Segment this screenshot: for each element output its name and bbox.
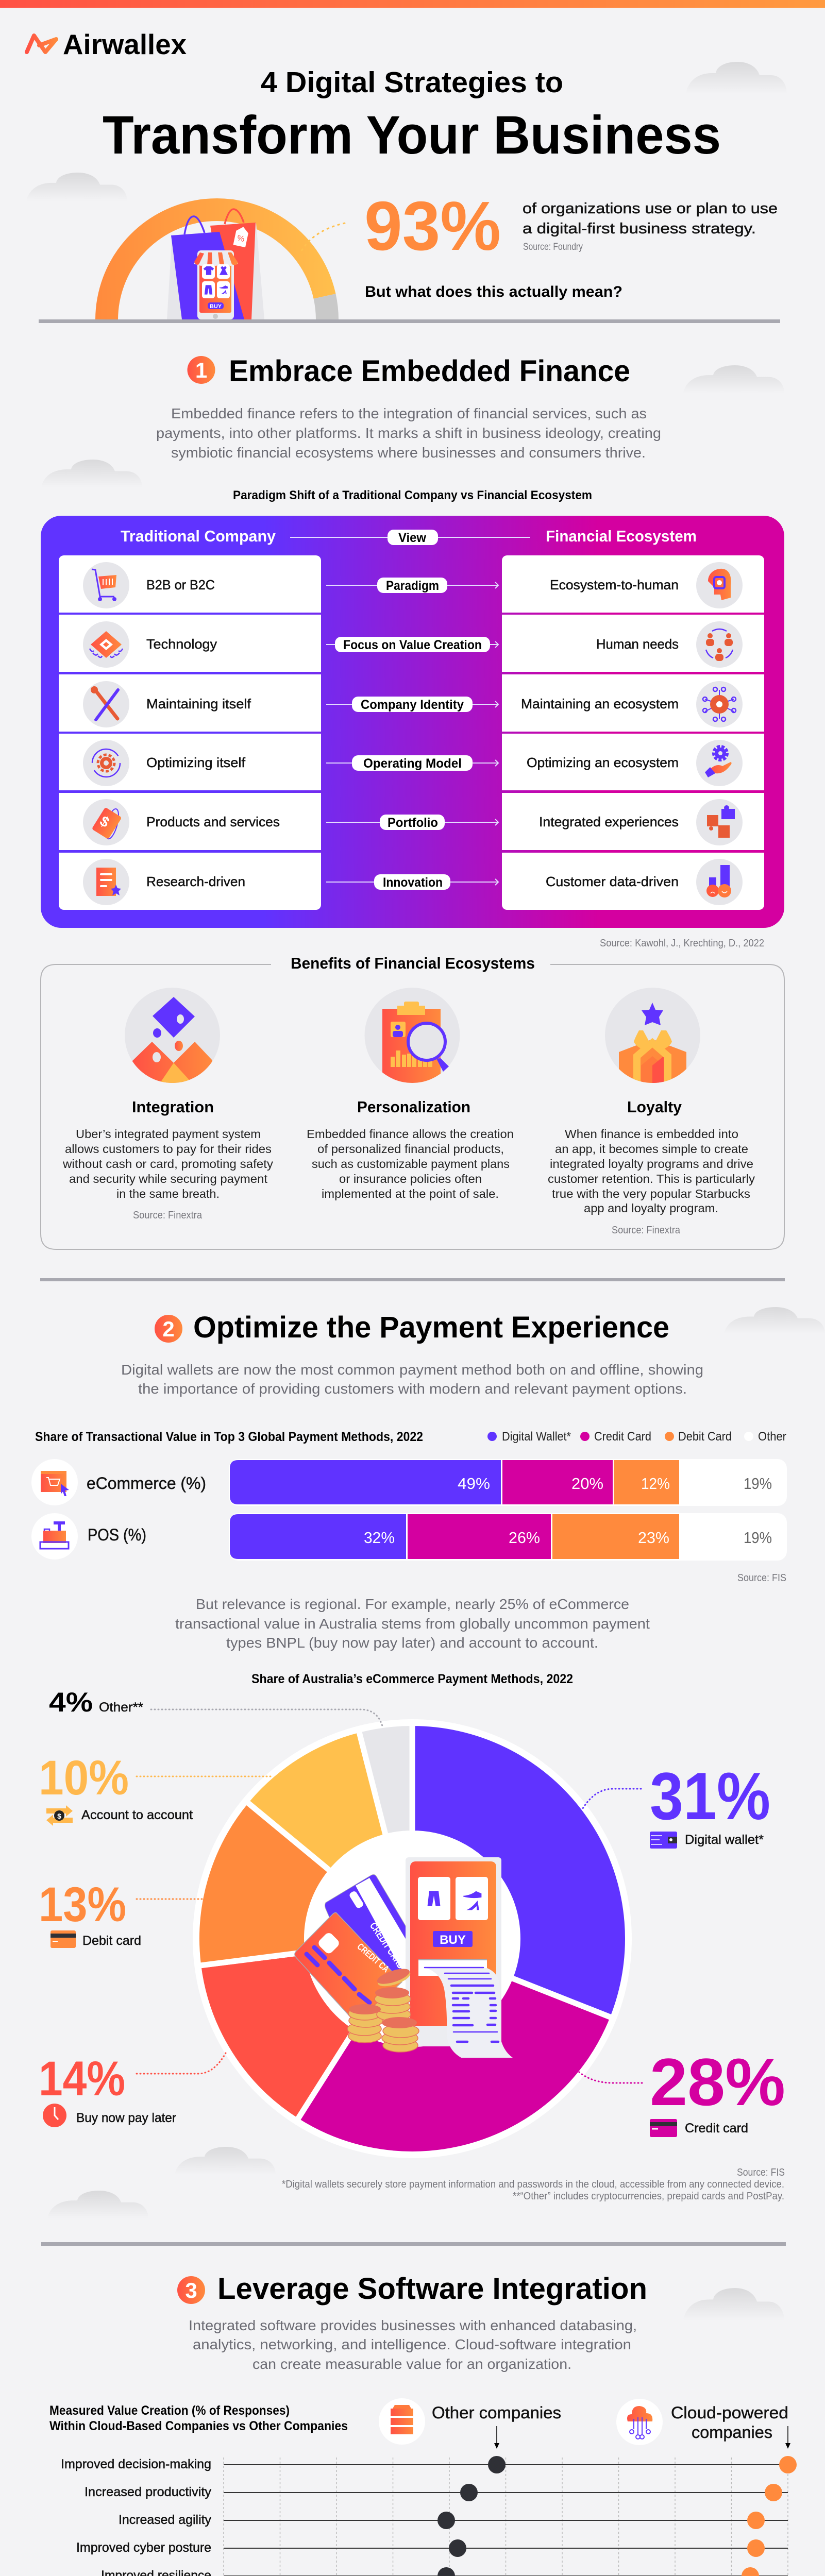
heading: section 1: 1	[195, 358, 207, 382]
icon: POS register	[31, 1513, 78, 1560]
text: embedded finance intro: symbiotic financial ecosystems where businesses and consumers thrive.	[171, 445, 646, 461]
right column text: Customer data-driven	[546, 874, 679, 889]
label: account to account 10 percent: 10%	[39, 1751, 129, 1805]
text: integrated software intro: analytics, networking, and intelligence. Cloud-software integration	[193, 2336, 631, 2352]
left column text: Maintaining itself	[146, 696, 251, 711]
icon: transfer	[46, 1805, 73, 1826]
donut chart: Australia payment methods	[193, 1719, 632, 2158]
table header: View	[398, 531, 427, 545]
row labels: centre pills: Company Identity	[361, 698, 464, 712]
title	[103, 66, 721, 165]
icon: debit card	[50, 1930, 76, 1948]
benefit: integration: Integration	[132, 1098, 214, 1116]
illustration: checkout terminal, cards and coins: CREDIT CARD	[367, 1920, 407, 1971]
arrows between columns	[326, 582, 498, 885]
icon: clock	[43, 2104, 66, 2127]
logo: Airwallex: Airwallex	[63, 28, 187, 60]
label: account to account 10 percent: Account to account	[81, 1808, 193, 1822]
label: debit card 13 percent	[39, 1877, 203, 1948]
label: credit card 28 percent: Credit card	[685, 2121, 748, 2136]
row labels: Improved cyber posture	[76, 2540, 211, 2555]
icon: cart	[83, 562, 129, 608]
row labels: centre pills: Innovation	[383, 875, 443, 890]
bar chart: POS: 19%	[744, 1529, 772, 1547]
icon: transfer: $	[57, 1812, 61, 1820]
right column text: Maintaining an ecosystem	[521, 696, 679, 711]
text: digital wallets intro: the importance of providing customers with modern and relevant payment options.	[138, 1381, 687, 1397]
bar chart: POS	[31, 1513, 787, 1561]
text: relevance is regional: But relevance is regional. For example, nearly 25% of eCommerce	[196, 1596, 629, 1612]
stat: 93 percent: Source: Foundry	[523, 242, 583, 252]
legend: payment methods: Digital Wallet*	[502, 1430, 571, 1444]
title: Transform Your Business	[103, 105, 721, 165]
icon: network	[696, 681, 743, 727]
icon: head with chip	[696, 562, 743, 608]
benefit: loyalty: integrated loyalty programs and drive	[550, 1157, 753, 1171]
table header	[121, 527, 697, 545]
benefit: integration: allows customers to pay for their rides	[65, 1142, 272, 1156]
bar chart: POS: 32%	[364, 1529, 395, 1547]
icon: tools	[83, 681, 129, 727]
benefit: integration: without cash or card, promoting safety	[62, 1157, 274, 1171]
legend: cloud-powered companies	[616, 2399, 790, 2449]
stat: 93 percent: of organizations use or plan to use	[523, 200, 778, 217]
legend: cloud-powered companies: companies	[692, 2423, 772, 2442]
text: relevance is regional: types BNPL (buy now pay later) and account to account.	[226, 1635, 598, 1651]
icon: price tag	[83, 799, 129, 845]
label: credit card 28 percent	[579, 2044, 785, 2137]
label: credit card 28 percent: 28%	[650, 2044, 785, 2120]
legend: other companies: Other companies	[432, 2403, 561, 2422]
left column text: B2B or B2C	[146, 577, 215, 592]
bar chart: POS: 23%	[638, 1529, 669, 1547]
text: integrated software intro	[189, 2317, 637, 2372]
dumbbell chart: value creation	[34, 2456, 804, 2576]
bar chart: eCommerce: 49%	[458, 1475, 490, 1493]
bar chart: POS: 26%	[509, 1529, 540, 1547]
chart title: measured value creation: Measured Value Creation (% of Responses)	[49, 2403, 290, 2418]
text: digital wallets intro: Digital wallets are now the most common payment method both on and offline, showing	[121, 1362, 703, 1378]
source: paradigm table: Source: Kawohl, J., Krechting, D., 2022	[600, 938, 764, 949]
label: buy now pay later 14 percent	[39, 2052, 226, 2127]
benefit: loyalty: app and loyalty program.	[584, 1201, 718, 1215]
label: digital wallet 31 percent: 31%	[650, 1758, 770, 1834]
illustration: checkout terminal, cards and coins	[295, 1857, 513, 2058]
right column text: Integrated experiences	[539, 814, 679, 829]
heading: benefits: Benefits of Financial Ecosystems	[291, 954, 535, 972]
icon: puzzle pieces	[696, 799, 743, 845]
illustration: gauge with shopping bags and phone	[107, 209, 347, 319]
table header: Traditional Company	[121, 527, 276, 545]
bar chart: eCommerce: eCommerce (%)	[87, 1474, 206, 1493]
chart title: paradigm shift: Paradigm Shift of a Traditional Company vs Financial Ecosystem	[233, 488, 592, 502]
benefit: integration	[62, 1098, 274, 1221]
row labels: Increased agility	[119, 2513, 211, 2527]
notes: donut sources: **“Other” includes cryptocurrencies, prepaid cards and PostPay.	[513, 2191, 784, 2202]
icon: eCommerce	[31, 1459, 78, 1505]
benefit: loyalty: an app, it becomes simple to create	[555, 1142, 748, 1156]
label: buy now pay later 14 percent: Buy now pay later	[76, 2111, 176, 2125]
icon: people circle	[696, 621, 743, 668]
legend: cloud-powered companies: Cloud-powered	[671, 2403, 788, 2422]
label: other 4 percent: 4%	[49, 1687, 93, 1718]
left column text: Optimizing itself	[146, 755, 246, 770]
chart title: Australia payments: Share of Australia’s eCommerce Payment Methods, 2022	[251, 1672, 573, 1686]
bar chart: POS: POS (%)	[88, 1526, 146, 1544]
right column text	[521, 577, 679, 889]
icon: chip	[83, 621, 129, 668]
benefit: personalization: Personalization	[357, 1098, 470, 1116]
benefit: personalization: implemented at the point of sale.	[322, 1187, 499, 1200]
right column text: Human needs	[596, 636, 679, 652]
icon: hand and gear	[696, 740, 743, 786]
bar chart: eCommerce: 20%	[571, 1475, 603, 1493]
row labels: centre pills: Focus on Value Creation	[343, 638, 482, 652]
heading: section 2: Optimize the Payment Experience	[193, 1311, 669, 1344]
right column text: Optimizing an ecosystem	[527, 755, 679, 770]
label: debit card 13 percent: 13%	[39, 1877, 126, 1932]
left column text: Products and services	[146, 814, 280, 829]
title: 4 Digital Strategies to	[261, 66, 563, 99]
text: embedded finance intro	[156, 405, 661, 461]
benefit: loyalty: customer retention. This is particularly	[548, 1172, 755, 1185]
right column text: Ecosystem-to-human	[550, 577, 679, 592]
notes: donut sources	[282, 2167, 785, 2202]
icon: optimize gear	[83, 740, 129, 786]
text: digital wallets intro	[121, 1362, 703, 1397]
benefit: personalization	[307, 1098, 514, 1200]
row labels: centre pills: Operating Model	[363, 756, 462, 771]
icon: price tag: $	[97, 813, 112, 831]
source: FIS: Source: FIS	[737, 1572, 786, 1584]
notes: donut sources: *Digital wallets securely store payment information and passwords in the cloud, accessible from any connected device.	[282, 2179, 784, 2190]
text: relevance is regional	[175, 1596, 650, 1651]
benefit: loyalty: When finance is embedded into	[565, 1127, 738, 1141]
row labels: centre pills: Portfolio	[388, 816, 438, 830]
icon: research document	[83, 859, 129, 905]
icon: bars and faces	[696, 859, 743, 905]
row labels: centre pills: Paradigm	[386, 579, 439, 593]
bar chart: eCommerce: 19%	[744, 1475, 772, 1493]
benefit: integration: and security while securing payment	[69, 1172, 268, 1185]
legend: payment methods: Other	[758, 1430, 786, 1444]
benefit: loyalty: Source: Finextra	[612, 1225, 681, 1236]
text: integrated software intro: can create measurable value for an organization.	[252, 2356, 571, 2372]
benefit: personalization: such as customizable payment plans	[312, 1157, 510, 1171]
icon: integration puzzle	[125, 988, 220, 1087]
label: other 4 percent	[49, 1687, 382, 1726]
heading: section 3: 3	[185, 2278, 197, 2302]
benefit: integration: in the same breath.	[116, 1187, 220, 1200]
stat: 93 percent	[364, 187, 778, 265]
bar chart: eCommerce: 12%	[641, 1475, 670, 1493]
panel: benefits of financial ecosystems	[41, 954, 784, 1249]
text: relevance is regional: transactional value in Australia stems from globally uncommon payment	[175, 1616, 650, 1632]
left column text: Research-driven	[146, 874, 245, 889]
chart title: transactional value: Share of Transactional Value in Top 3 Global Payment Methods, 2022	[35, 1430, 423, 1444]
illustration: checkout terminal, cards and coins: BUY	[440, 1933, 466, 1947]
label: buy now pay later 14 percent: 14%	[39, 2052, 125, 2106]
row labels	[34, 2457, 212, 2576]
left column text: Technology	[146, 636, 217, 652]
row labels: Improved decision-making	[61, 2457, 211, 2471]
benefit: personalization: Embedded finance allows the creation	[307, 1127, 514, 1141]
panel: paradigm shift table	[41, 516, 784, 928]
icon: credit card	[650, 2119, 677, 2137]
legend: payment methods: Debit Card	[678, 1430, 732, 1444]
row labels: centre pills	[335, 578, 490, 890]
label: account to account 10 percent	[39, 1751, 274, 1826]
benefit: integration: Source: Finextra	[133, 1210, 203, 1221]
benefit: integration: Uber’s integrated payment system	[76, 1127, 261, 1141]
label: digital wallet 31 percent	[583, 1758, 770, 1849]
icon: wallet	[650, 1832, 677, 1849]
heading: section 1: Embrace Embedded Finance	[229, 354, 630, 388]
left column text	[146, 577, 280, 889]
text: embedded finance intro: Embedded finance refers to the integration of financial services, such as	[171, 405, 647, 421]
label: debit card 13 percent: Debit card	[82, 1934, 141, 1948]
bar chart: eCommerce	[31, 1459, 787, 1506]
label: digital wallet 31 percent: Digital wallet*	[685, 1833, 764, 1847]
stat: 93 percent: a digital-first business strategy.	[523, 221, 756, 237]
illustration: checkout terminal, cards and coins: CREDIT CA	[355, 1941, 391, 1974]
question text: But what does this actually mean?	[365, 283, 622, 300]
text: embedded finance intro: payments, into other platforms. It marks a shift in business ideology, creating	[156, 425, 661, 441]
benefit: loyalty: Loyalty	[627, 1098, 682, 1116]
legend: payment methods	[487, 1430, 786, 1444]
notes: donut sources: Source: FIS	[737, 2167, 785, 2178]
legend: payment methods: Credit Card	[594, 1430, 651, 1444]
chart title: measured value creation	[49, 2403, 348, 2433]
benefit: loyalty: true with the very popular Starbucks	[552, 1187, 750, 1200]
legend: other companies	[379, 2398, 561, 2449]
heading: section 3: Leverage Software Integration	[217, 2272, 647, 2306]
benefit: personalization: of personalized financial products,	[317, 1142, 504, 1156]
icon: personalization clipboard	[365, 988, 460, 1086]
illustration: gauge with shopping bags and phone: BUY	[210, 303, 222, 310]
label: other 4 percent: Other**	[99, 1700, 143, 1715]
table header: Financial Ecosystem	[546, 527, 697, 545]
stat: 93 percent: 93%	[364, 187, 501, 265]
text: integrated software intro: Integrated software provides businesses with enhanced databasing,	[189, 2317, 637, 2333]
benefit: personalization: or insurance policies often	[339, 1172, 482, 1185]
heading: section 2: 2	[162, 1317, 175, 1341]
benefit: loyalty	[548, 1098, 755, 1236]
row labels: Increased productivity	[85, 2485, 211, 2499]
chart title: measured value creation: Within Cloud-Based Companies vs Other Companies	[49, 2419, 348, 2433]
icon: loyalty gift	[605, 988, 700, 1087]
illustration: gauge with shopping bags and phone: %	[237, 234, 245, 244]
